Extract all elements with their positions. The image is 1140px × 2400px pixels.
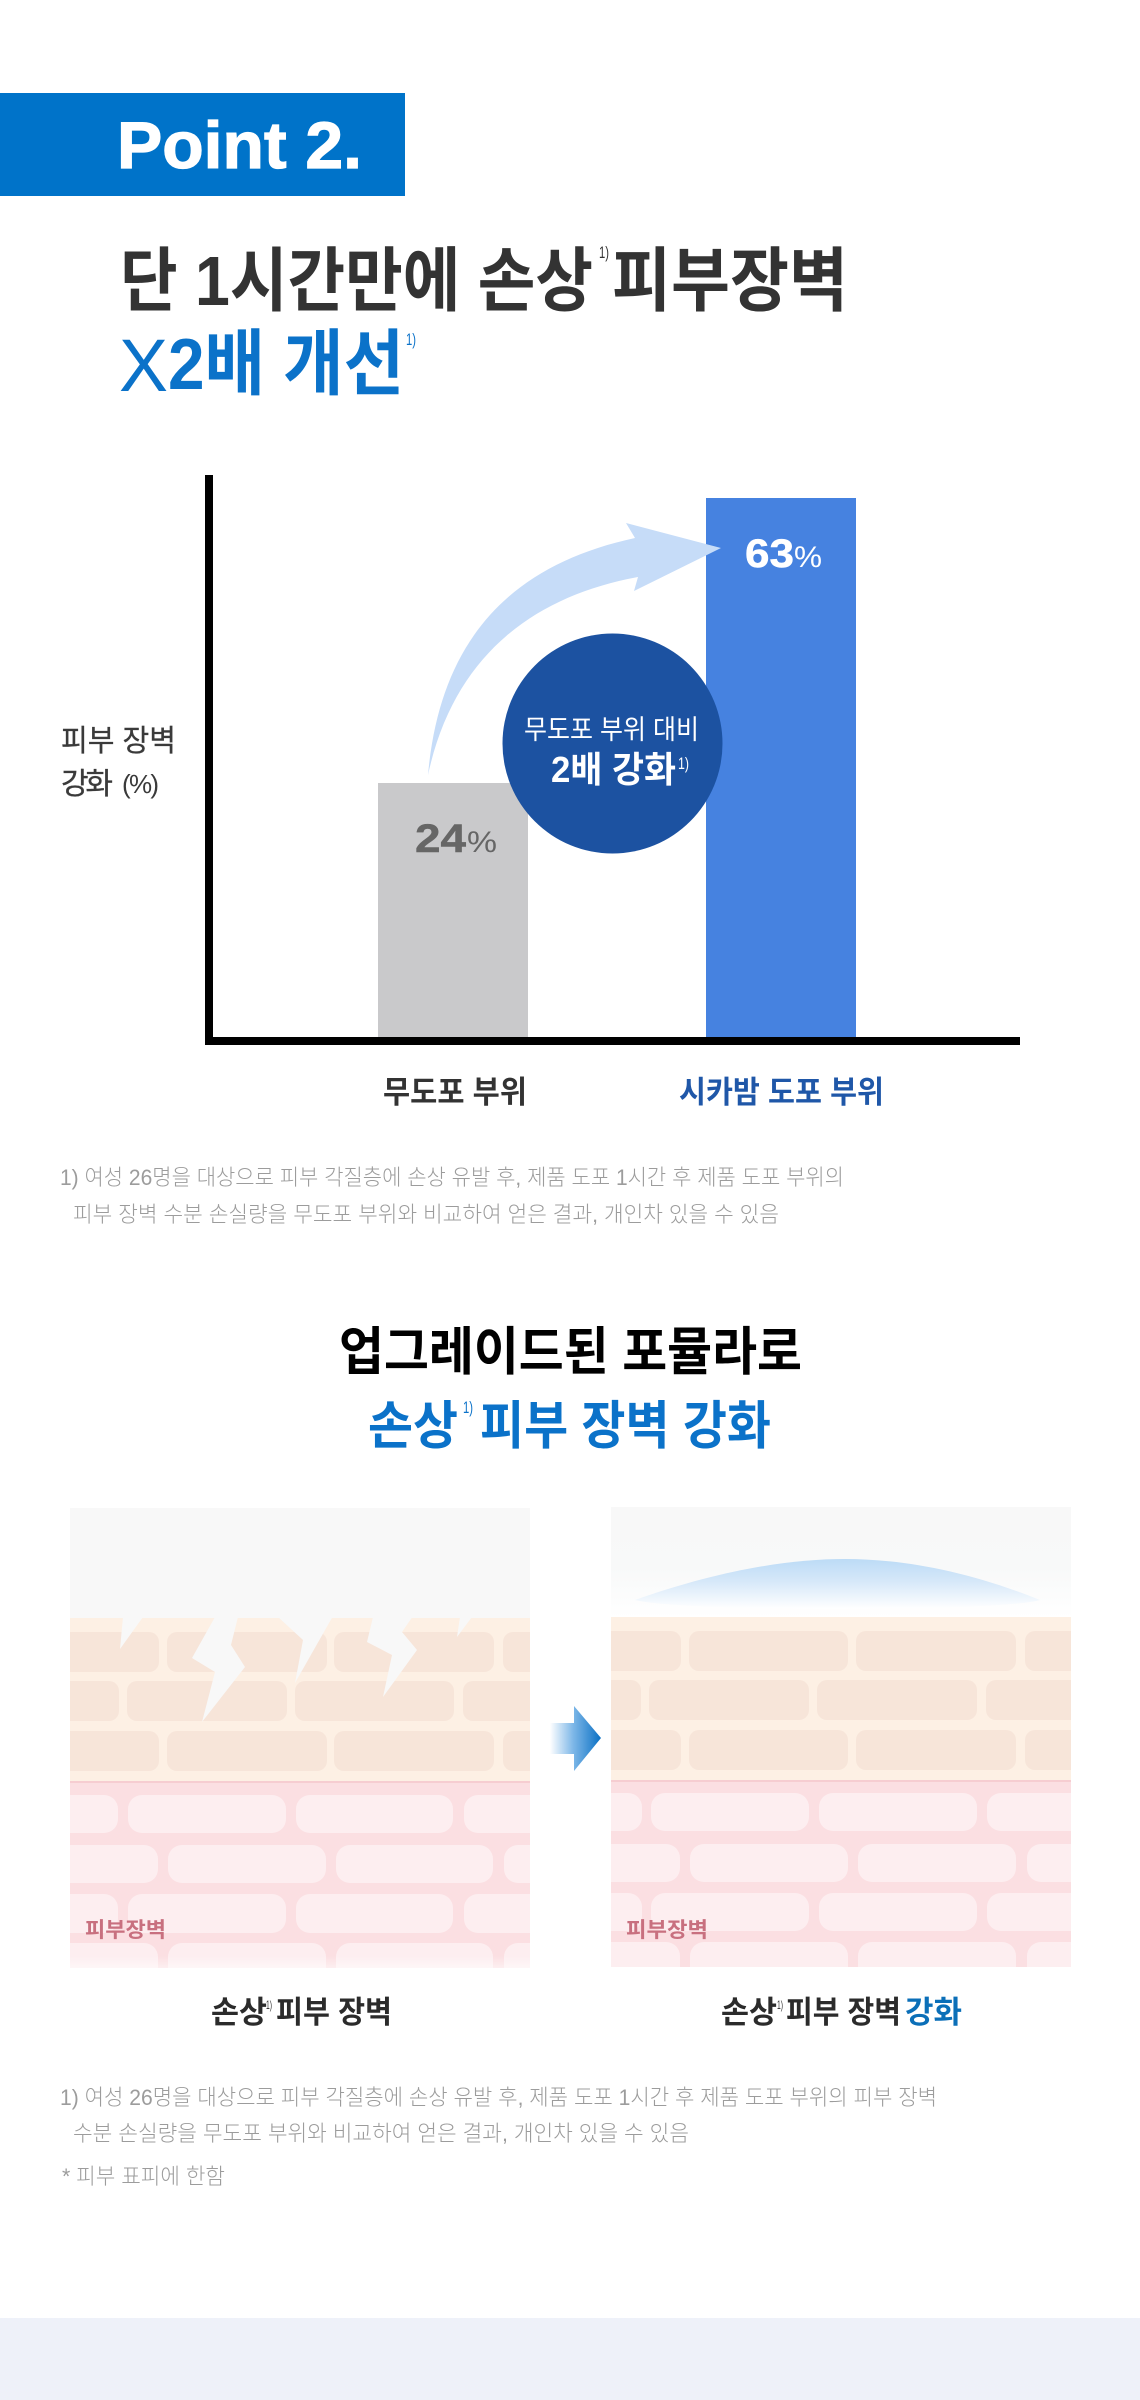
bar: untreated 24% <box>378 783 528 1037</box>
bar: untreated 24%: 24 <box>415 817 467 861</box>
footnote 2: 수분 손실량을 무도포 부위와 비교하여 얻은 결과, 개인차 있을 수 있음 <box>73 2121 689 2146</box>
caption: reinforced barrier: 피부 장벽 <box>786 1995 901 2030</box>
point banner: Point 2. <box>117 108 362 182</box>
moisture dome <box>636 1559 1039 1602</box>
y axis label <box>61 725 176 801</box>
panel: reinforced skin barrier <box>611 1559 1071 1967</box>
x axis labels: 무도포 부위 <box>383 1075 527 1110</box>
section heading: 업그레이드된 포뮬라로 <box>339 1324 802 1382</box>
title: 1) <box>406 330 416 349</box>
point banner <box>0 93 405 196</box>
caption: damaged barrier <box>211 1995 392 2030</box>
callout circle <box>502 634 722 854</box>
footnote 1: 피부 장벽 수분 손실량을 무도포 부위와 비교하여 얻은 결과, 개인차 있을 수 있음 <box>73 1202 779 1227</box>
footnote 1: 1) 여성 26명을 대상으로 피부 각질층에 손상 유발 후, 제품 도포 1시간 후 제품 도포 부위의 <box>60 1165 844 1190</box>
title: 2배 개선 <box>168 325 404 405</box>
beige cells <box>70 1632 530 1771</box>
cracks <box>120 1616 472 1722</box>
pink cells <box>70 1795 530 1967</box>
title: X <box>119 324 168 407</box>
bar chart <box>61 475 1020 1110</box>
title: 1) <box>599 243 609 262</box>
chart axes <box>205 475 1020 1045</box>
footnote 2 <box>60 2085 937 2189</box>
panel: damaged skin barrier <box>70 1618 530 1968</box>
bar: treated 63%: % <box>794 541 822 574</box>
x axis labels: 시카밤 도포 부위 <box>679 1075 884 1110</box>
y axis label: (%) <box>122 769 159 799</box>
footnote 2: 1) 여성 26명을 대상으로 피부 각질층에 손상 유발 후, 제품 도포 1시간 후 제품 도포 부위의 피부 장벽 <box>60 2085 937 2110</box>
pink cells <box>611 1793 1071 1967</box>
y axis label: 강화 <box>61 768 113 801</box>
caption: reinforced barrier: 손상 <box>721 1995 777 2030</box>
beige cells <box>611 1631 1071 1770</box>
caption: damaged barrier: 손상 <box>211 1995 267 2030</box>
x axis labels <box>383 1075 884 1110</box>
label: skin barrier: 피부장벽 <box>85 1919 166 1942</box>
title: 피부장벽 <box>612 242 848 320</box>
footnote 1 <box>60 1165 844 1227</box>
caption: reinforced barrier: 강화 <box>905 1995 962 2030</box>
section heading: 1) <box>463 1398 473 1417</box>
section heading <box>339 1324 802 1456</box>
arrow: before to after <box>550 1706 601 1771</box>
section heading: 피부 장벽 강화 <box>480 1398 771 1456</box>
caption: damaged barrier: 1) <box>266 1998 272 2012</box>
arrow: growth curve <box>428 523 721 775</box>
caption: reinforced barrier <box>721 1995 962 2030</box>
callout circle: 무도포 부위 대비 <box>524 715 699 745</box>
bar: untreated 24%: % <box>467 826 497 859</box>
callout circle: 1) <box>678 754 689 773</box>
caption: damaged barrier: 피부 장벽 <box>276 1995 392 2030</box>
caption: reinforced barrier: 1) <box>777 1998 783 2012</box>
footnote 2: * 피부 표피에 한함 <box>62 2164 225 2189</box>
title: 단 1시간만에 손상 <box>120 242 593 320</box>
label: skin barrier: 피부장벽 <box>626 1919 708 1942</box>
y axis label: 피부 장벽 <box>61 725 176 758</box>
bar: treated 63%: 63 <box>745 532 794 576</box>
bar: treated 63% <box>706 498 856 1037</box>
title <box>119 242 848 407</box>
section heading: 손상 <box>368 1398 458 1456</box>
bottom band <box>0 2318 1140 2400</box>
callout circle: 2배 강화 <box>551 749 676 790</box>
